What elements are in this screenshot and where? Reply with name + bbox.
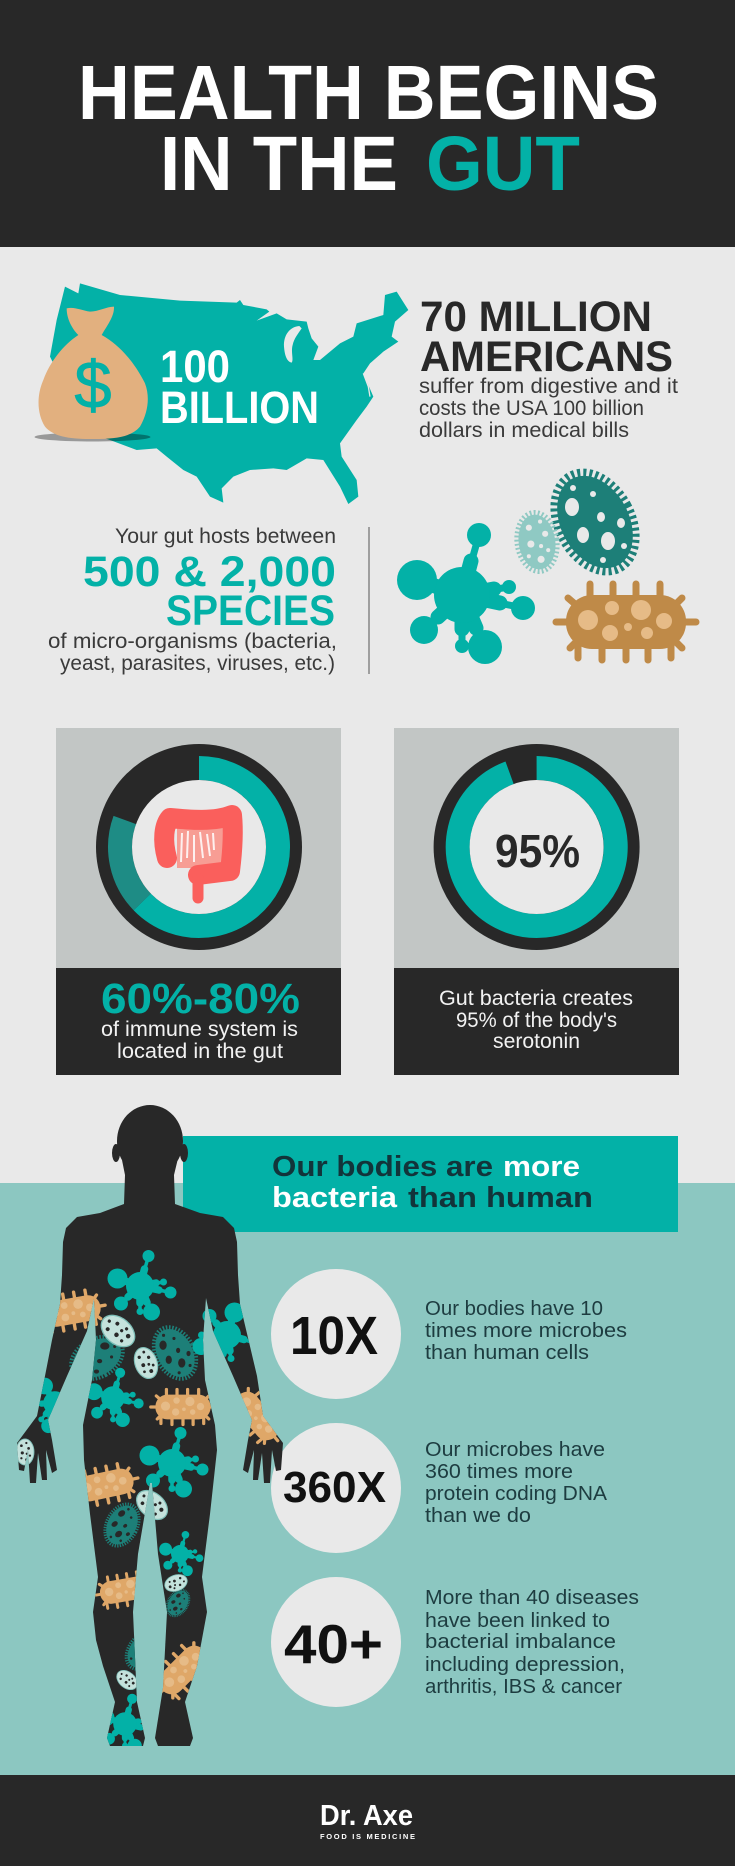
species text block: SPECIES — [166, 587, 335, 635]
70 million Americans text: suffer from digestive and it — [419, 375, 678, 398]
60-80% caption: of immune system is — [101, 1018, 298, 1041]
logo: Dr. Axe: FOOD IS MEDICINE — [320, 1832, 415, 1841]
stat: 10X — [271, 1269, 627, 1399]
species text block: Your gut hosts between — [115, 525, 336, 548]
stat: 40+: 40+ — [284, 1613, 383, 1675]
serotonin caption: 95% of the body's — [456, 1009, 617, 1032]
100 billion label — [160, 341, 319, 433]
stat: 360X: 360X — [283, 1463, 386, 1512]
footer with logo — [0, 1775, 735, 1866]
70 million Americans text: 70 MILLION — [420, 293, 652, 341]
icon: intestines — [164, 815, 233, 898]
icon: microbes group — [397, 459, 696, 664]
header panel — [0, 0, 735, 247]
donut chart: 60-80% — [96, 744, 302, 950]
70 million Americans text: AMERICANS — [420, 333, 673, 381]
species text block: yeast, parasites, viruses, etc.) — [60, 652, 335, 675]
money bag icon: $ — [74, 348, 112, 423]
stat: 360X: protein coding DNA — [425, 1482, 607, 1505]
banner: more bacteria than human — [183, 1136, 678, 1232]
stat: 360X — [271, 1423, 607, 1553]
species text block — [48, 525, 337, 675]
map of the USA — [50, 283, 408, 504]
100 billion label: BILLION — [160, 382, 319, 433]
60-80% caption: located in the gut — [117, 1040, 283, 1063]
panel: immune system card — [56, 728, 341, 1075]
stat: 360X: 360 times more — [425, 1460, 573, 1483]
70 million Americans text: costs the USA 100 billion — [419, 397, 644, 420]
60-80% caption: 60%-80% — [101, 975, 300, 1023]
stat: 40+: including depression, — [425, 1653, 625, 1676]
title — [78, 50, 659, 207]
70 million Americans text: dollars in medical bills — [419, 419, 629, 442]
stat: 10X: Our bodies have 10 — [425, 1297, 603, 1320]
stat: 360X: than we do — [425, 1504, 531, 1527]
species text block: 500 & 2,000 — [83, 548, 336, 596]
60-80% caption — [101, 975, 300, 1063]
US map with money bag — [34, 283, 408, 504]
body silhouette with microbes — [17, 1105, 283, 1746]
serotonin caption: serotonin — [493, 1030, 580, 1053]
serotonin caption: Gut bacteria creates — [439, 987, 633, 1010]
stat: 40+: have been linked to — [425, 1609, 610, 1632]
money bag icon — [34, 307, 150, 442]
banner: more bacteria than human: Our bodies are — [272, 1151, 493, 1183]
stat: 10X: than human cells — [425, 1341, 589, 1364]
panel: bacteria section background — [0, 1183, 735, 1775]
stat: 10X: times more microbes — [425, 1319, 627, 1342]
donut chart: 95%: 95% — [495, 825, 580, 877]
stat: 360X: Our microbes have — [425, 1438, 605, 1461]
stat: 40+: More than 40 diseases — [425, 1586, 639, 1609]
donut chart: 95% — [434, 744, 640, 950]
70 million Americans text — [419, 293, 678, 442]
species text block: of micro-organisms (bacteria, — [48, 630, 337, 653]
serotonin caption — [439, 987, 633, 1053]
logo: Dr. Axe: Dr. Axe — [320, 1800, 413, 1832]
stat: 40+ — [271, 1577, 639, 1707]
title: GUT — [426, 121, 580, 207]
banner: more bacteria than human: bacteria — [272, 1182, 398, 1214]
banner: more bacteria than human: than human — [408, 1182, 593, 1214]
title: IN THE — [160, 121, 398, 207]
stat: 10X: 10X — [290, 1306, 378, 1366]
stat: 40+: arthritis, IBS & cancer — [425, 1675, 622, 1698]
banner: more bacteria than human: more — [503, 1151, 580, 1183]
title: HEALTH BEGINS — [78, 50, 659, 136]
100 billion label: 100 — [160, 341, 230, 392]
panel: serotonin card — [394, 728, 679, 1075]
stat: 40+: bacterial imbalance — [425, 1630, 616, 1653]
